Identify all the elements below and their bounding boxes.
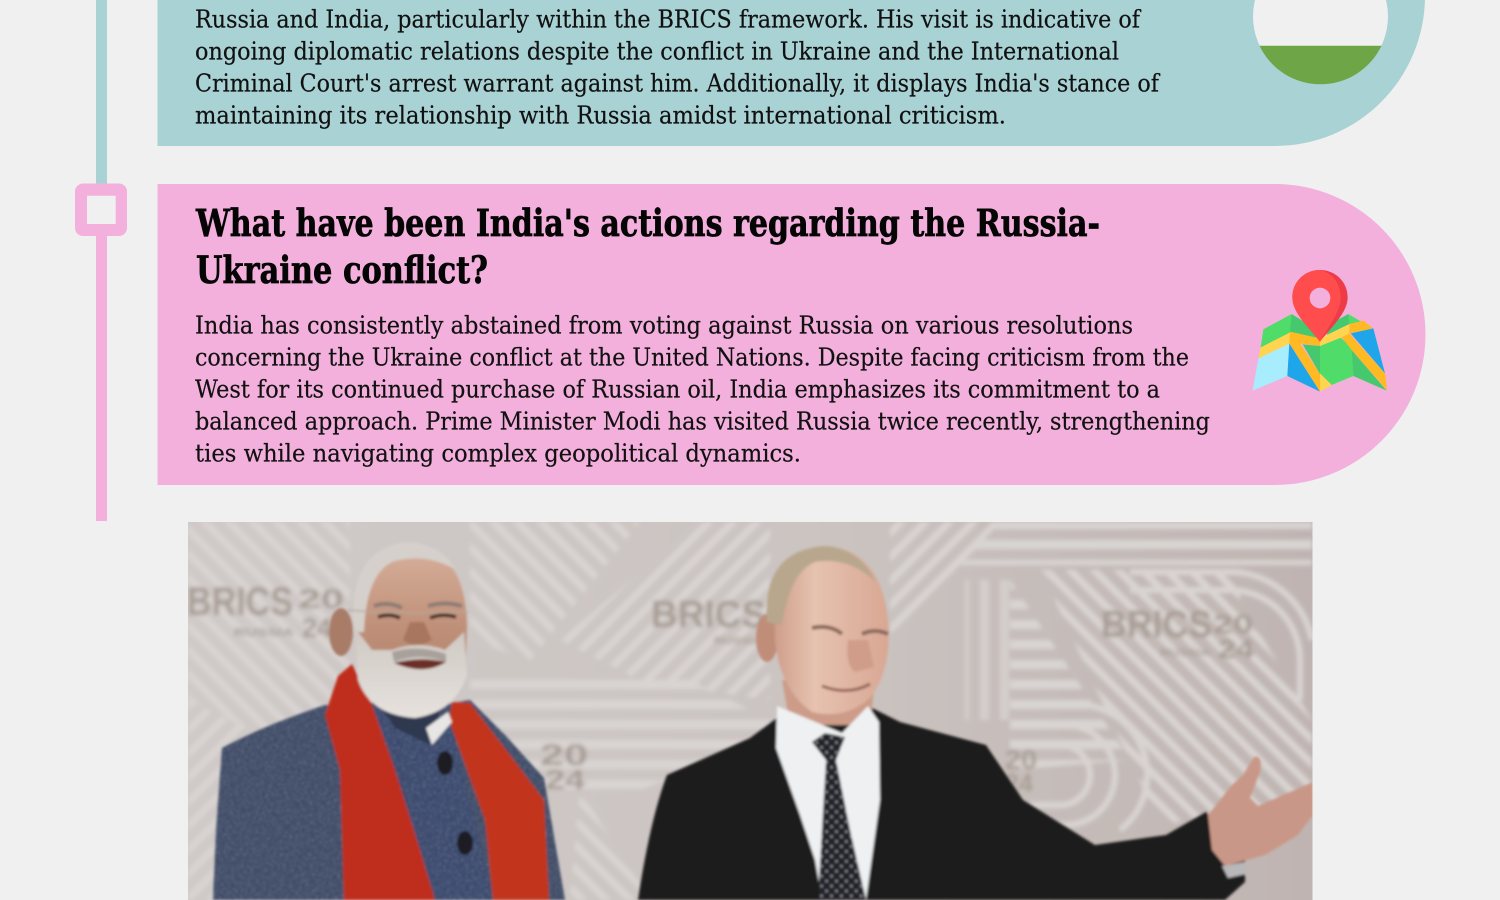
panel text: ongoing diplomatic relations despite the conflict in Ukraine and the International [195, 38, 1119, 66]
icon: India flag circle [1253, 0, 1388, 84]
BRICS logos: 24 [1005, 768, 1034, 798]
BRICS logos: 20 [1005, 744, 1037, 775]
BRICS logos [187, 580, 1255, 798]
ear [329, 608, 353, 656]
icon: map with location pin [1253, 270, 1387, 392]
panel heading: Ukraine conflict? [196, 248, 488, 292]
panel: Russia-India ties [158, 0, 1425, 146]
BRICS logos: 24 [1218, 634, 1255, 664]
panel text: balanced approach. Prime Minister Modi has visited Russia twice recently, strengthening [195, 408, 1210, 436]
face [358, 558, 468, 654]
BRICS logos: BRICS [651, 594, 766, 636]
figure: Modi [213, 542, 565, 900]
panel: India's actions [158, 184, 1426, 485]
panel text: India has consistently abstained from voting against Russia on various resolutions [195, 312, 1133, 340]
scarf [325, 664, 435, 900]
panel heading [195, 201, 1100, 292]
ear [756, 614, 778, 662]
photo backdrop with BRICS pattern [180, 515, 1320, 900]
BRICS logos: BRICS [1101, 604, 1212, 646]
buttons [437, 751, 453, 775]
panel text: ties while navigating complex geopolitical dynamics. [195, 440, 801, 468]
jacket [213, 700, 565, 900]
panel text [195, 6, 1161, 130]
panel text: West for its continued purchase of Russian oil, India emphasizes its commitment to a [195, 376, 1160, 404]
eyes and glasses [348, 604, 468, 618]
shirt [776, 706, 880, 900]
BRICS logos: 20 [1213, 609, 1253, 639]
BRICS logos: BRICS [187, 580, 293, 624]
panel text [195, 312, 1210, 468]
BRICS logos: RUSSIA [234, 627, 294, 639]
BRICS logos: RUSSIA [714, 636, 764, 647]
tie [812, 733, 866, 900]
timeline [75, 0, 127, 521]
face [775, 546, 889, 714]
hair [353, 542, 456, 632]
beard [355, 628, 467, 718]
photo: Modi and Putin at BRICS 2024 [180, 515, 1320, 900]
facial features [812, 627, 888, 634]
BRICS logos: 24 [302, 613, 332, 643]
BRICS logos: 20 [298, 584, 344, 614]
BRICS logos: 20 [540, 739, 588, 772]
neck [782, 680, 875, 725]
suit [638, 707, 1245, 900]
figure: Putin [638, 546, 1313, 900]
panel text: Criminal Court's arrest warrant against him. Additionally, it displays India's stance of [195, 70, 1161, 98]
panel text: concerning the Ukraine conflict at the United Nations. Despite facing criticism from the [195, 344, 1189, 372]
hand and cuff [1222, 862, 1246, 878]
hair [767, 546, 876, 625]
BRICS logos: RUSSIA [1160, 648, 1210, 659]
panel heading: What have been India's actions regarding the Russia- [195, 201, 1100, 245]
panel text: Russia and India, particularly within the BRICS framework. His visit is indicative of [195, 6, 1142, 34]
timeline marker [75, 184, 127, 236]
BRICS logos: 24 [545, 764, 586, 795]
panel text: maintaining its relationship with Russia amidst international criticism. [195, 102, 1006, 130]
